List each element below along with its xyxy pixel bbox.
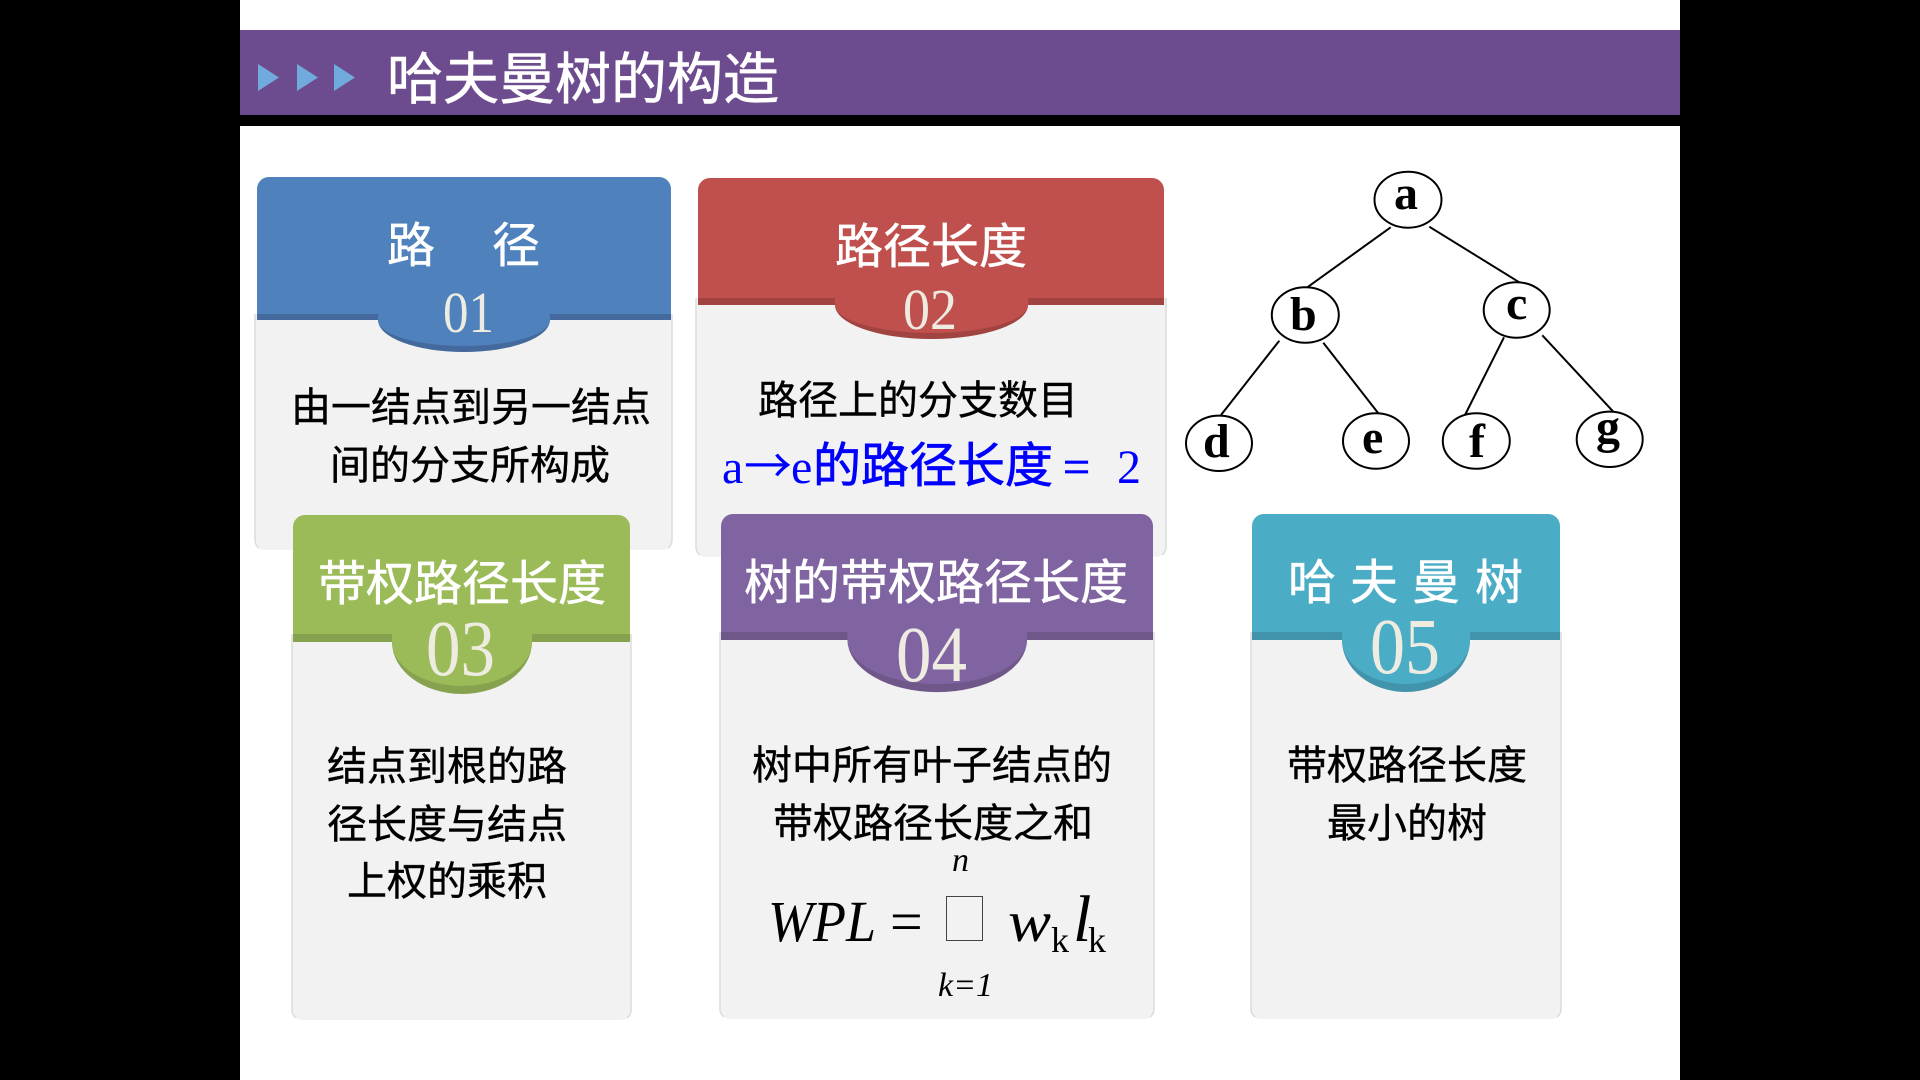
- panel: 05 huffman tree: [1251, 514, 1561, 1019]
- binary tree diagram: a: [1394, 167, 1418, 220]
- panel: 04 tree weighted path length: [720, 514, 1154, 1019]
- header bar: [240, 30, 1680, 115]
- number 04: 04: [896, 612, 967, 699]
- text block: 最小的树: [1327, 802, 1487, 846]
- text block: [752, 744, 1112, 846]
- blue formula: =: [1063, 441, 1090, 494]
- heading: 路径: [387, 220, 540, 273]
- title: 哈夫曼树的构造: [387, 48, 779, 111]
- blue formula: 的路径长度: [813, 440, 1053, 493]
- blue formula: →: [744, 427, 792, 497]
- binary tree diagram: c: [1506, 277, 1527, 330]
- text block: [1287, 744, 1527, 846]
- number 05: 05: [1370, 604, 1440, 691]
- number 01: 01: [443, 280, 494, 345]
- WPL formula: WPL: [768, 889, 876, 954]
- heading: 哈夫曼树: [1288, 557, 1523, 610]
- text block: 树中所有叶子结点的: [752, 744, 1112, 788]
- WPL formula: k: [1051, 920, 1069, 960]
- WPL formula: l: [1073, 883, 1091, 956]
- binary tree diagram: d: [1203, 415, 1230, 468]
- heading: 路径长度: [835, 221, 1027, 274]
- WPL formula: k=1: [938, 967, 993, 1004]
- heading: 带权路径长度: [318, 558, 606, 611]
- number 02: 02: [903, 277, 957, 342]
- WPL formula: n: [952, 842, 969, 879]
- text block: 路径上的分支数目: [758, 379, 1078, 423]
- text block: 带权路径长度之和: [773, 802, 1093, 846]
- binary tree diagram: [1186, 167, 1643, 471]
- binary tree diagram: g: [1596, 401, 1620, 454]
- blue formula: a: [722, 441, 743, 494]
- text block: 径长度与结点: [327, 803, 567, 847]
- binary tree diagram: f: [1469, 415, 1486, 468]
- binary tree diagram: e: [1362, 411, 1383, 464]
- blue formula: 2: [1117, 441, 1141, 494]
- WPL formula: [768, 842, 1106, 1004]
- WPL formula: k: [1088, 920, 1106, 960]
- text block: 由一结点到另一结点: [291, 386, 651, 430]
- text block: 间的分支所构成: [330, 444, 610, 488]
- panel: 01 path: [255, 177, 672, 550]
- panel: 02 path length: [696, 178, 1166, 557]
- blue formula: e: [791, 441, 812, 494]
- text block: 结点到根的路: [327, 745, 567, 789]
- text block: 上权的乘积: [347, 860, 547, 904]
- WPL formula: w: [1008, 889, 1051, 954]
- binary tree diagram: b: [1290, 288, 1317, 341]
- heading: 树的带权路径长度: [744, 557, 1128, 610]
- WPL formula: =: [890, 889, 923, 954]
- number 03: 03: [426, 606, 495, 693]
- text block: 带权路径长度: [1287, 744, 1527, 788]
- blue formula: [722, 427, 1141, 497]
- text block: [291, 386, 651, 488]
- icon: three arrows: [258, 64, 355, 91]
- panel: 03 weighted path length: [292, 515, 631, 1020]
- text block: [327, 745, 567, 904]
